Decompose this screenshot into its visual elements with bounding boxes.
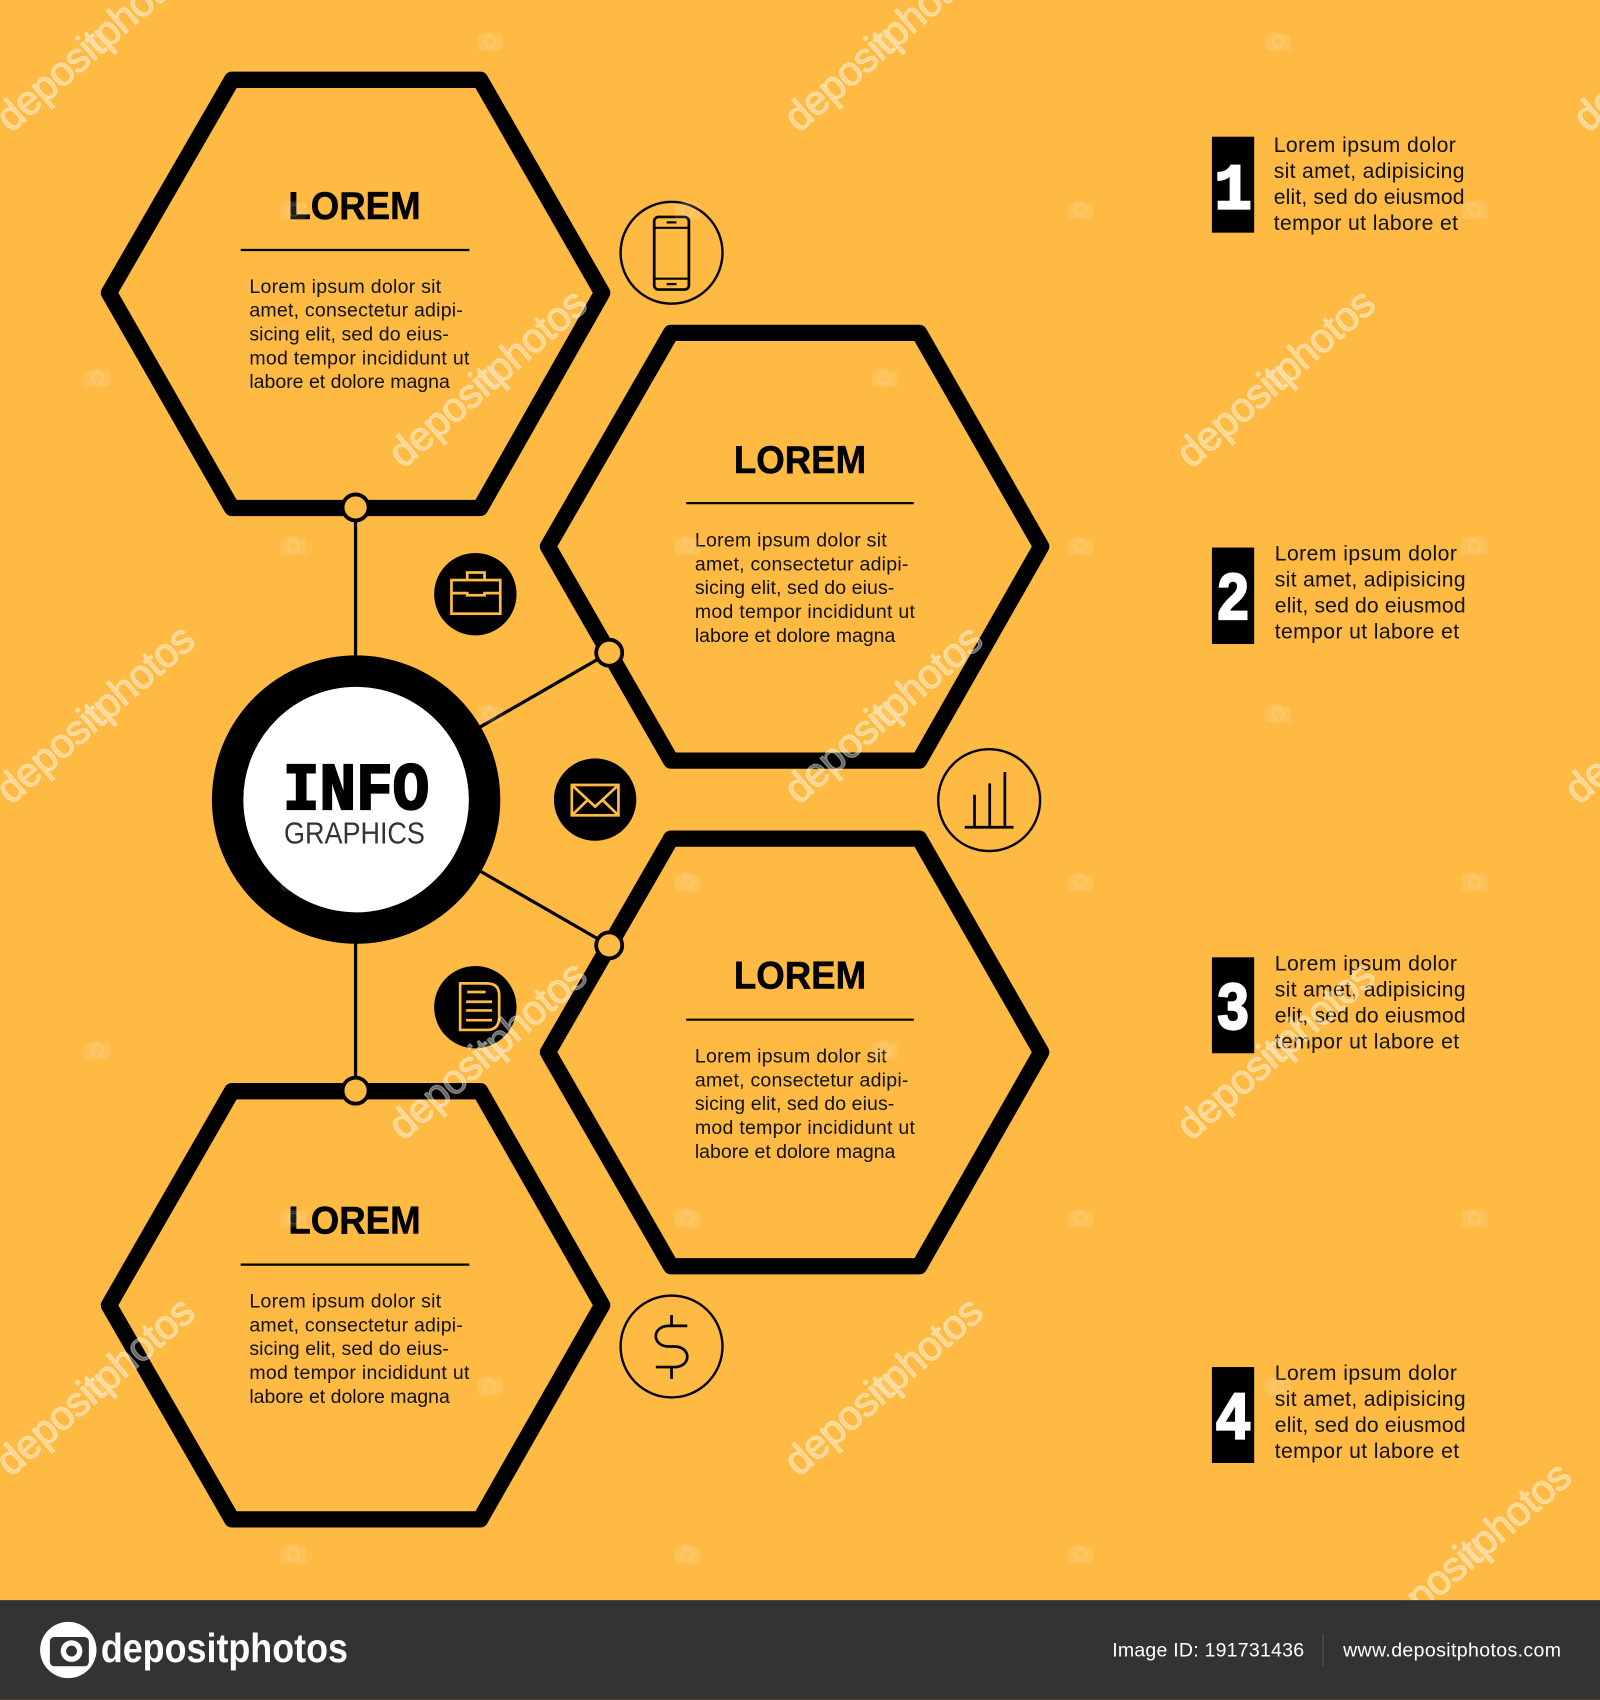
text block: Lorem ipsum dolor sit [249,276,442,298]
list item 3: 3 [1217,970,1249,1043]
watermarks: depositphotos [379,279,596,476]
panel: hexagon 3 [548,839,1041,1266]
text block: mod tempor incididunt ut [695,601,915,623]
icon: document [434,966,517,1048]
text block: amet, consectetur adipi- [249,300,463,322]
text block: labore et dolore magna [695,1141,896,1163]
icon: briefcase [434,553,517,635]
text block: labore et dolore magna [695,625,896,647]
text block: Lorem ipsum dolor sit [249,1290,442,1312]
small camera watermarks [85,33,1487,1563]
panel: hexagon 4 [109,1091,602,1519]
text block: Lorem ipsum dolor [1274,134,1456,157]
text block [1275,952,1466,1053]
text block: tempor ut labore et [1275,1030,1459,1053]
website: www.depositphotos.com [1342,1640,1561,1662]
icon: envelope [554,758,636,841]
text block: elit, sed do eiusmod [1275,1414,1466,1437]
list item 1: 1 [1214,154,1252,228]
logo wordmark: depositphotos [101,1625,348,1671]
icon: phone [621,202,722,304]
text block: sicing elit, sed do eius- [695,577,894,599]
text block: tempor ut labore et [1274,212,1458,235]
watermarks: depositphotos [775,615,991,812]
text block: elit, sed do eiusmod [1275,1004,1466,1027]
heading: LOREM [734,955,866,998]
watermarks: depositphotos [775,1288,991,1484]
text block: mod tempor incididunt ut [249,1362,470,1384]
list item 4: 4 [1216,1380,1250,1453]
list item 1 [1212,134,1464,235]
list item 2: 2 [1217,560,1249,633]
text block [1275,1362,1466,1463]
text block: sicing elit, sed do eius- [249,324,449,346]
text block: elit, sed do eiusmod [1274,186,1464,209]
image id: Image ID: 191731436 [1112,1640,1304,1662]
text block [1275,543,1466,644]
text block [1274,134,1464,235]
watermarks: depositphotos [1363,1452,1580,1649]
connector dots [343,494,622,1104]
text block [249,1290,470,1408]
icon: bar chart [938,749,1040,851]
text block [695,529,915,647]
watermarks: depositphotos [1167,952,1384,1148]
text block: amet, consectetur adipi- [695,553,908,575]
subtitle: GRAPHICS: GRAPHICS [284,817,425,850]
text block: amet, consectetur adipi- [695,1069,908,1091]
text block: Lorem ipsum dolor sit [695,529,887,551]
text block: mod tempor incididunt ut [249,347,470,369]
text block [249,276,470,393]
text block: tempor ut labore et [1275,621,1459,644]
text block: sicing elit, sed do eius- [695,1093,894,1115]
text block: labore et dolore magna [249,371,450,393]
text block: sit amet, adipisicing [1275,569,1466,592]
list item 3 [1212,952,1466,1053]
text block: sit amet, adipisicing [1274,160,1464,183]
panel: hexagon 2 [548,333,1041,761]
heading: LOREM [288,185,421,228]
watermarks: depositphotos [1167,279,1384,476]
title: INFO: INFO [283,754,429,830]
watermarks: depositphotos [379,952,596,1148]
footer bar [0,1600,1600,1700]
text block: Lorem ipsum dolor [1275,1362,1457,1385]
text block: Lorem ipsum dolor sit [695,1045,887,1067]
heading: LOREM [734,439,866,482]
central circle [228,671,485,928]
logo icon [40,1622,96,1678]
text block: amet, consectetur adipi- [249,1314,463,1336]
heading: LOREM [288,1200,421,1243]
text block: mod tempor incididunt ut [695,1117,915,1139]
panel: hexagon 1 [109,80,602,508]
text block: labore et dolore magna [249,1386,450,1408]
text block: elit, sed do eiusmod [1275,595,1466,618]
text block: Lorem ipsum dolor [1275,952,1457,975]
icon: dollar [621,1296,722,1397]
text block: sit amet, adipisicing [1275,1388,1466,1411]
text block [695,1045,915,1163]
text block: Lorem ipsum dolor [1275,543,1457,566]
text block: sit amet, adipisicing [1275,978,1466,1001]
connector lines [356,507,609,1091]
list item 2 [1212,543,1466,644]
list item 4 [1212,1362,1466,1463]
text block: sicing elit, sed do eius- [249,1338,449,1360]
text block: tempor ut labore et [1275,1440,1459,1463]
